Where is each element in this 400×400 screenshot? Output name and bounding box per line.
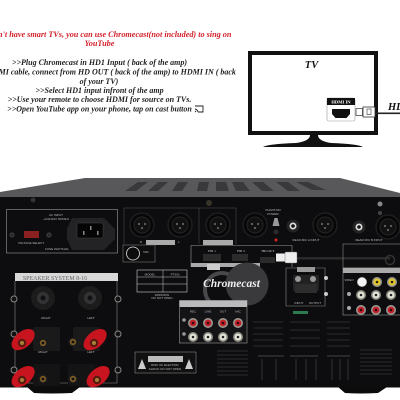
spec table: MODEL [145, 272, 156, 276]
instructions heading [0, 30, 232, 48]
spec table: DO NOT OPEN [152, 296, 172, 300]
AC input panel: FUSE 20A/T10AL [45, 247, 69, 251]
instruction steps: >>Use your remote to choose HDMI for source on TVs. [8, 95, 191, 104]
mic symbol box: MIC [143, 250, 150, 254]
speaker system panel: LEFT [87, 350, 95, 354]
warning label left [135, 352, 196, 373]
instruction steps: >>Select HD1 input infront of the amp [35, 86, 164, 95]
AC input panel [6, 210, 118, 253]
instruction steps: >>Plug Chromecast in HD1 Input ( back of the amp) [12, 58, 187, 67]
chromecast [203, 262, 268, 307]
HDMI cable on amp [276, 252, 394, 264]
ventilation and spec print [217, 322, 392, 380]
AC input panel: VOLTAGE SELECT [18, 241, 44, 245]
phantom power: PHANTOM [266, 208, 281, 212]
voltage selector [24, 231, 39, 238]
instruction steps [0, 58, 236, 114]
AV jacks panel [343, 244, 400, 315]
amp body [0, 197, 400, 388]
power socket [67, 218, 115, 250]
REC LINE OUT MIC jacks: MIC [235, 310, 242, 314]
instruction steps: >>Open YouTube app on your phone, tap on cast button [7, 104, 192, 114]
spec table [137, 270, 187, 300]
TV stand [263, 135, 363, 147]
HDMI panel: HD OUT [261, 249, 275, 253]
icon: cast button [195, 106, 203, 112]
amp top cover [0, 178, 400, 202]
phantom power: POWER [267, 212, 279, 216]
speaker system panel: RIGHT [41, 316, 51, 320]
HDMI IN port: HDMI IN [331, 100, 351, 104]
TV screen bezel [250, 53, 376, 133]
input/output box [286, 267, 328, 314]
AC input panel: ~220/110V 50/60Hz [43, 217, 70, 221]
label: Chromecast [203, 278, 261, 290]
input/output box: OUTPUT [309, 301, 321, 305]
HDMI panel [191, 246, 292, 267]
warning label left: SHOCK DO NOT OPEN [149, 367, 181, 371]
REC LINE OUT MIC jacks: LINE [205, 310, 211, 314]
speaker system panel [8, 273, 121, 391]
instructions heading: YouTube [85, 39, 115, 48]
binding posts [33, 327, 60, 351]
rear mic inputs: REAR MIC B INPUT [355, 238, 383, 242]
REC LINE OUT MIC jacks: OUT [220, 310, 226, 314]
mic symbol box [123, 245, 155, 262]
speaker system panel: SPEAKER SYSTEM 8-16 [23, 276, 87, 282]
XLR inputs [124, 208, 267, 245]
HDMI plug and cable [356, 107, 400, 117]
spec table: PT300 [171, 272, 180, 276]
TV label: TV [305, 60, 319, 71]
rear mic inputs: REAR MIC A INPUT [292, 238, 320, 242]
HDMI IN port [327, 98, 355, 121]
speaker system panel: LEFT [87, 316, 95, 320]
phantom power [266, 208, 281, 242]
speaker system panel: RIGHT [38, 350, 48, 354]
AC input panel: AC INPUT [49, 213, 63, 217]
feet [27, 387, 387, 394]
input/output box: INPUT [294, 301, 304, 305]
rear mic inputs [286, 202, 400, 242]
XLR inputs: R [140, 240, 143, 244]
spec table: WARNING [155, 293, 170, 297]
AV jacks panel: VIDEO [344, 278, 354, 282]
warning label left: RISK OF ELECTRIC [151, 363, 180, 367]
TV illustration [250, 53, 400, 147]
amplifier rear panel [0, 178, 400, 394]
XLR inputs: L [178, 240, 180, 244]
instruction steps: of your TV) [80, 77, 119, 86]
REC LINE OUT MIC jacks: REC [190, 310, 197, 314]
REC LINE OUT MIC jacks [180, 300, 247, 343]
HDMI panel: HD 2 [237, 249, 245, 253]
HDMI panel: HD 1 [208, 249, 216, 253]
